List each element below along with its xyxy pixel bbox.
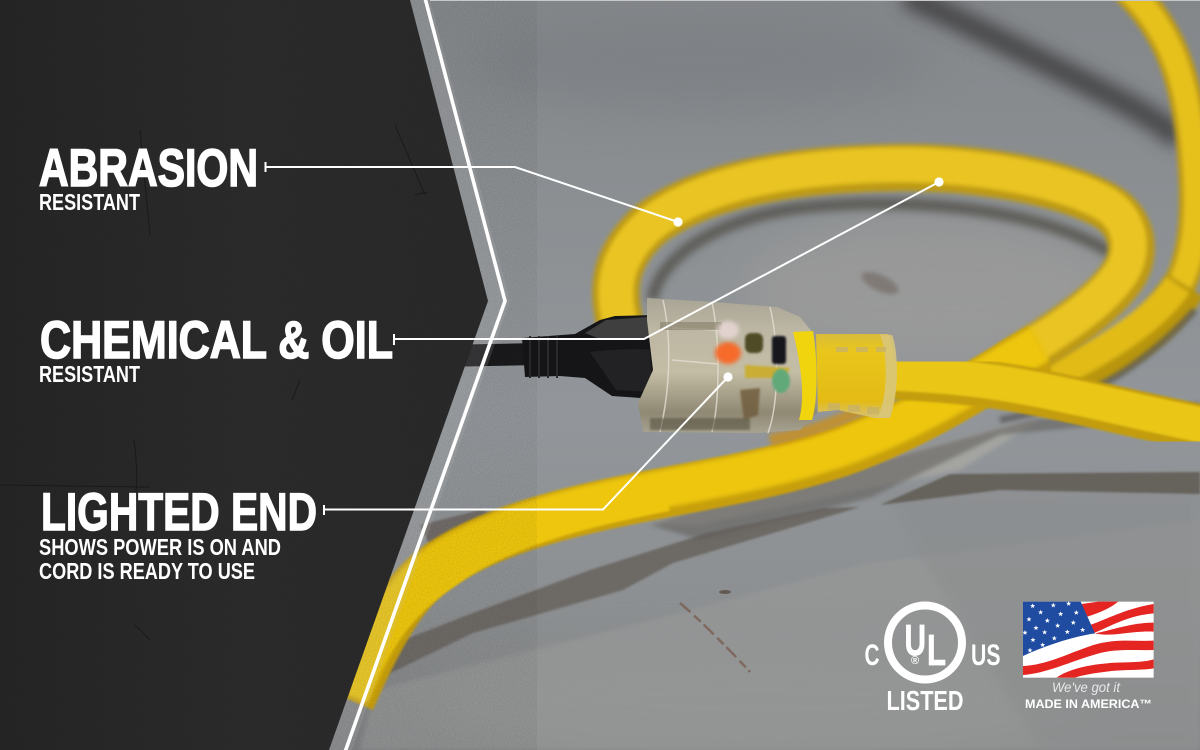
- callout: chemical and oil resistant: [39, 177, 944, 387]
- subtext: resistant: RESISTANT: [39, 361, 140, 387]
- flag: [1022, 601, 1154, 678]
- black strain relief and molded body: [522, 315, 655, 399]
- callout: abrasion resistant: [39, 139, 683, 227]
- red stripes: [1023, 602, 1154, 678]
- ribbed yellow collar: [816, 334, 897, 418]
- heading: abrasion: ABRASION: [39, 139, 258, 198]
- heading: chemical and oil: CHEMICAL & OIL: [40, 311, 393, 370]
- transparent lighted plug: [638, 298, 817, 433]
- callout: lighted end: [39, 372, 733, 584]
- floor stain: [858, 267, 902, 299]
- translucent band beside the dark panel: [329, 0, 510, 750]
- green indicator: [772, 369, 790, 393]
- canton stars: [1022, 601, 1085, 652]
- pale glow near light: [717, 321, 739, 339]
- ring: [888, 606, 962, 680]
- plug highlights and ribs: [660, 300, 776, 433]
- dark interior parts: [650, 322, 790, 430]
- leader line with dot: [394, 177, 944, 345]
- slogan line one: We've got it: [1052, 680, 1121, 695]
- loop cord: [616, 165, 1131, 365]
- chevron white outline: [345, 0, 505, 750]
- logo: American flag with slogan: [1022, 601, 1154, 711]
- blue canton: [1023, 602, 1095, 656]
- letter L: L: [927, 626, 946, 675]
- leader line with dot: [266, 162, 683, 227]
- registered mark: ®: [911, 655, 919, 667]
- letters US: US: [971, 639, 1000, 672]
- listed label: LISTED: [886, 685, 964, 716]
- logo: cULus listed: [864, 606, 1000, 716]
- yellow cord leaving the plug: [885, 373, 1200, 430]
- subtext: cord ready: CORD IS READY TO USE: [39, 558, 255, 584]
- slogan line two: MADE IN AMERICA™: [1025, 697, 1152, 711]
- floor shadows bottom: [370, 402, 1200, 683]
- shadow under far cord: [1000, 310, 1195, 420]
- far shadow upper right: [905, 0, 1180, 140]
- floor scratch marks: [680, 590, 750, 672]
- panel scratches: [0, 125, 428, 640]
- subtext: shows power: SHOWS POWER IS ON AND: [39, 534, 281, 560]
- letter c: C: [864, 639, 880, 672]
- far cord section: [1050, 0, 1196, 385]
- panel grain texture: [0, 0, 488, 750]
- heading: lighted end: LIGHTED END: [41, 483, 317, 542]
- panel: dark chevron background: [0, 0, 488, 750]
- flag field: [1023, 602, 1154, 678]
- yellow band inside plug: [793, 331, 817, 420]
- orange power light: [715, 342, 741, 364]
- floor tone patches: [360, 10, 1200, 750]
- front cord sweeping lower left: [350, 344, 1040, 700]
- letter U: U: [904, 616, 926, 665]
- leader line with dot: [324, 372, 733, 515]
- subtext: resistant: RESISTANT: [39, 189, 140, 215]
- black power cord: [440, 354, 540, 356]
- shadow inside loop: [652, 204, 1110, 300]
- top edge line: [430, 0, 1200, 1]
